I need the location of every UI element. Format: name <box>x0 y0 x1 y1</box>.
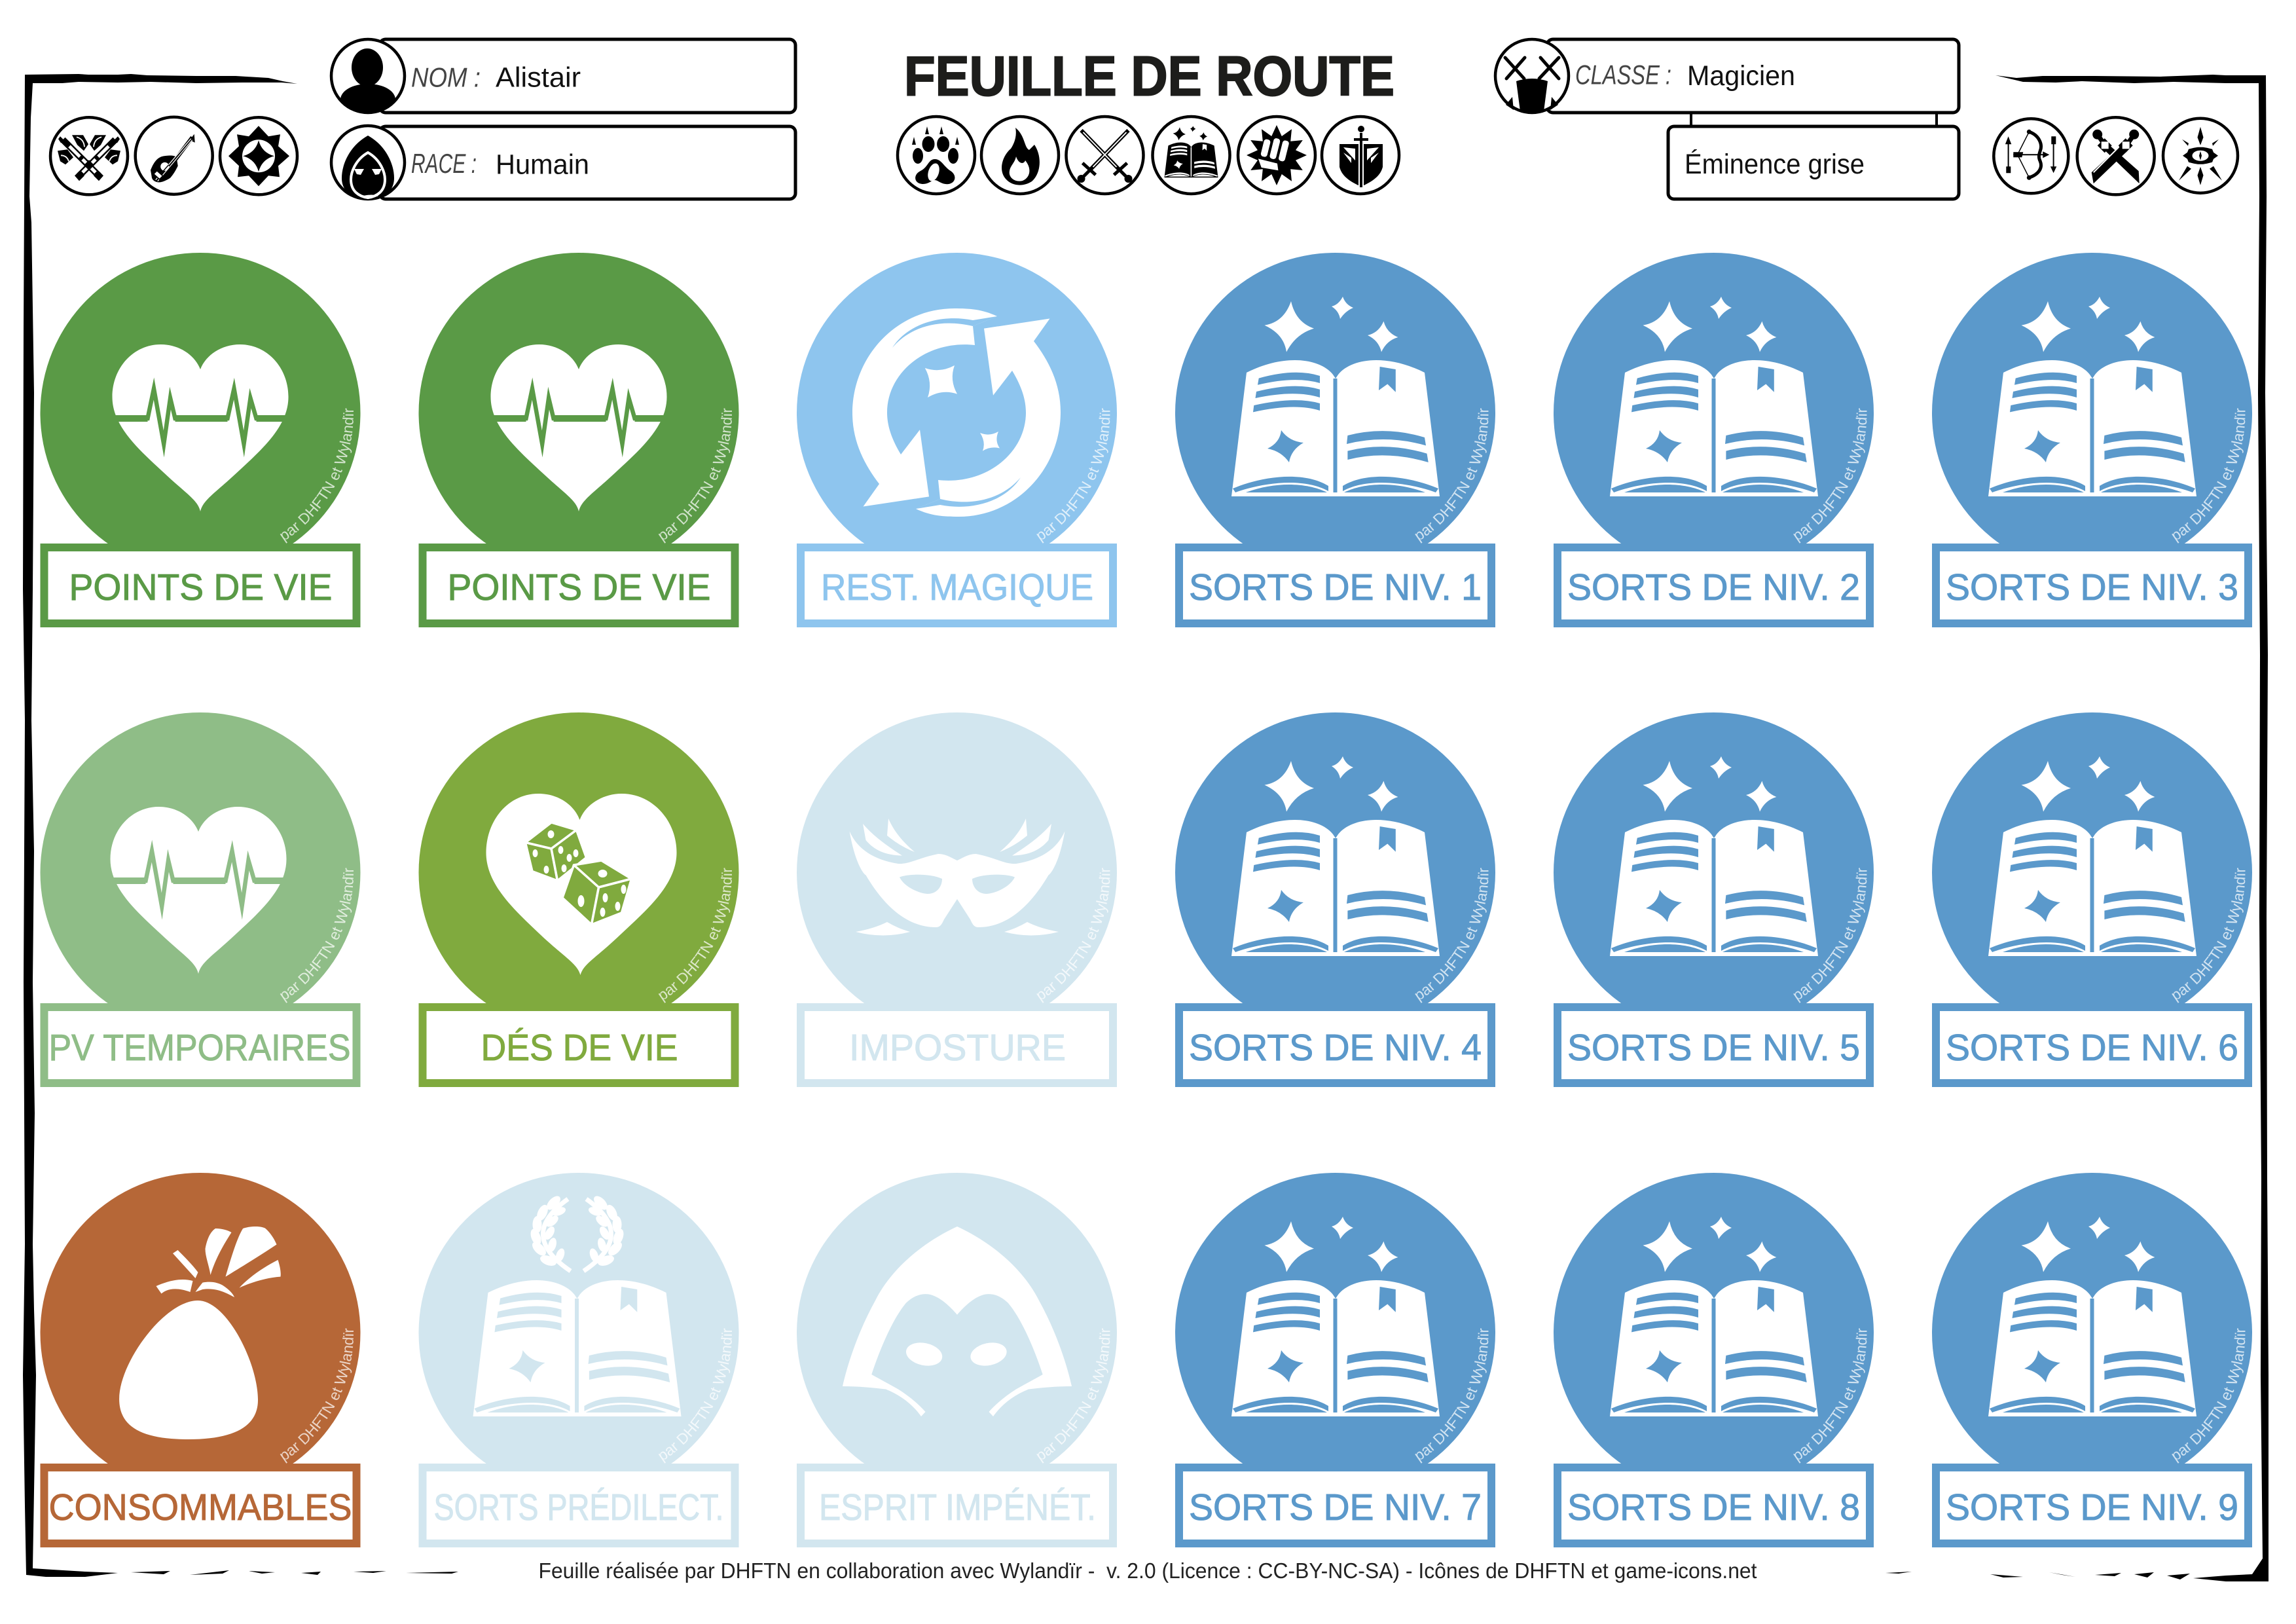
icon: book <box>1610 1280 1818 1416</box>
label: SORTS DE NIV. 3 <box>1946 566 2238 608</box>
label: SORTS DE NIV. 8 <box>1567 1486 1860 1528</box>
icon: book <box>473 1280 681 1416</box>
label box <box>801 547 1113 623</box>
card: des de vie <box>419 712 738 1083</box>
label: race: RACE : <box>411 148 477 179</box>
icon: stars <box>2022 756 2155 812</box>
label box <box>801 1007 1113 1083</box>
icon: crossed axes <box>50 117 128 194</box>
icon: fist burst <box>1238 117 1315 194</box>
badge disc <box>1932 712 2252 1033</box>
title: FEUILLE DE ROUTE <box>904 46 1394 108</box>
label box <box>1558 1467 1870 1543</box>
label box <box>1179 547 1491 623</box>
label box <box>1936 1467 2248 1543</box>
badge disc <box>41 712 360 1033</box>
value: race: Humain <box>496 149 589 181</box>
badge disc <box>1554 253 1874 573</box>
badge disc <box>419 253 738 573</box>
badge disc <box>41 1173 360 1493</box>
label: PV TEMPORAIRES <box>48 1027 351 1069</box>
badge disc <box>1932 253 2252 573</box>
label box <box>423 1467 735 1543</box>
icon: eye sun <box>2163 119 2238 193</box>
label: SORTS DE NIV. 5 <box>1567 1027 1860 1069</box>
icon: book <box>1988 1280 2196 1416</box>
badge disc <box>1175 1173 1495 1493</box>
icon: flame <box>981 117 1059 194</box>
label: DÉS DE VIE <box>481 1027 678 1069</box>
credit: par DHFTN et Wylandïr <box>280 1328 354 1464</box>
icon: heart with dice <box>486 794 677 975</box>
icon: heart <box>107 807 289 974</box>
icon: mask <box>850 819 1065 935</box>
card: restauration magique <box>797 253 1117 623</box>
icon: hooded avatar <box>331 126 405 199</box>
label: nom: NOM : <box>411 62 481 93</box>
label: CONSOMMABLES <box>48 1486 352 1528</box>
icon: book <box>1231 360 1440 496</box>
badge disc <box>419 712 738 1033</box>
label box <box>45 1007 356 1083</box>
card: sorts niveau 5 <box>1554 712 1874 1083</box>
label: SORTS DE NIV. 7 <box>1189 1486 1482 1528</box>
icon: person avatar <box>331 39 405 113</box>
icon: stars <box>2022 297 2155 352</box>
label box <box>45 1467 356 1543</box>
icon: book <box>1231 820 1440 956</box>
field: nom <box>331 39 795 113</box>
credit: par DHFTN et Wylandïr <box>280 868 354 1003</box>
card: sorts niveau 2 <box>1554 253 1874 623</box>
value: sous-classe: Éminence grise <box>1685 149 1865 180</box>
label box <box>1558 547 1870 623</box>
icon: paw with leaf <box>898 117 975 194</box>
card: esprit impenetrable <box>797 1173 1117 1543</box>
badge disc <box>797 1173 1117 1493</box>
icon: stars <box>1265 756 1398 812</box>
badge disc <box>41 253 360 573</box>
credit: par DHFTN et Wylandïr <box>1793 1328 1867 1464</box>
icon: wizard avatar <box>1495 39 1569 113</box>
credit: par DHFTN et Wylandïr <box>2172 409 2246 544</box>
label: POINTS DE VIE <box>448 566 711 608</box>
label box <box>423 547 735 623</box>
badge disc <box>1554 1173 1874 1493</box>
label box <box>423 1007 735 1083</box>
label: SORTS PRÉDILECT. <box>433 1486 724 1528</box>
credit: par DHFTN et Wylandïr <box>1415 1328 1489 1464</box>
icon: stars <box>2022 1217 2155 1272</box>
card: sorts niveau 8 <box>1554 1173 1874 1543</box>
icon: book <box>1231 1280 1440 1416</box>
icon: heart <box>109 344 292 511</box>
badge disc <box>797 253 1117 573</box>
credit: par DHFTN et Wylandïr <box>1793 409 1867 544</box>
card: consommables <box>41 1173 360 1543</box>
icon: spellbook <box>1152 117 1230 194</box>
icon: sack <box>119 1227 281 1439</box>
badge disc <box>797 712 1117 1033</box>
label box <box>801 1467 1113 1543</box>
card: imposture <box>797 712 1117 1083</box>
label box <box>45 547 356 623</box>
icon: book <box>1610 820 1818 956</box>
credit: par DHFTN et Wylandïr <box>659 409 732 544</box>
credit: par DHFTN et Wylandïr <box>280 409 354 544</box>
card: sorts niveau 1 <box>1175 253 1495 623</box>
credit: par DHFTN et Wylandïr <box>1793 868 1867 1003</box>
label box <box>1936 547 2248 623</box>
value: nom: Alistair <box>496 62 581 94</box>
label: SORTS DE NIV. 1 <box>1189 566 1482 608</box>
icon: stars <box>1265 1217 1398 1272</box>
icon: shield and sword <box>1322 117 1399 194</box>
card: sorts niveau 6 <box>1932 712 2252 1083</box>
badge disc <box>1554 712 1874 1033</box>
icon: stars <box>1265 297 1398 352</box>
badge disc <box>1932 1173 2252 1493</box>
card: sorts de predilection <box>419 1173 738 1543</box>
badge disc <box>1175 712 1495 1033</box>
icon: book <box>1988 820 2196 956</box>
card: sorts niveau 3 <box>1932 253 2252 623</box>
credit: par DHFTN et Wylandïr <box>1415 409 1489 544</box>
icon: laurel wreath <box>528 1194 626 1271</box>
icon: stars <box>1643 756 1776 812</box>
label box <box>1936 1007 2248 1083</box>
badge disc <box>419 1173 738 1493</box>
label: SORTS DE NIV. 2 <box>1567 566 1860 608</box>
card: points de vie 1 <box>41 253 360 627</box>
card: sorts niveau 7 <box>1175 1173 1495 1543</box>
label: SORTS DE NIV. 6 <box>1946 1027 2238 1069</box>
icon: stars <box>1643 297 1776 352</box>
label: classe: CLASSE : <box>1575 59 1671 90</box>
label box <box>1558 1007 1870 1083</box>
badge disc <box>1175 253 1495 573</box>
icon: bow and arrows <box>1994 119 2068 193</box>
icon: magic recovery arrows <box>852 308 1061 517</box>
card: points de vie 2 <box>419 253 738 623</box>
card: pv temporaires <box>41 712 360 1083</box>
label: ESPRIT IMPÉNÉT. <box>819 1486 1096 1528</box>
icon: crossed swords <box>1066 117 1143 194</box>
label: POINTS DE VIE <box>69 566 333 608</box>
label box <box>1179 1007 1491 1083</box>
icon: stars <box>1643 1217 1776 1272</box>
credit: par DHFTN et Wylandïr <box>659 1328 732 1463</box>
icon: crossed blades <box>2077 117 2155 194</box>
credit: par DHFTN et Wylandïr <box>1036 868 1110 1003</box>
icon: lute <box>136 117 213 194</box>
field: classe <box>1495 39 1959 199</box>
footer credits: Feuille réalisée par DHFTN en collaboration avec Wylandïr - v. 2.0 (Licence : CC-BY-NC-SA) - Icônes de DHFTN et game-icons.net <box>538 1559 1757 1583</box>
field: race <box>331 126 795 199</box>
credit: par DHFTN et Wylandïr <box>1036 1328 1110 1463</box>
icon: book <box>1610 360 1818 496</box>
label: SORTS DE NIV. 4 <box>1189 1027 1482 1069</box>
icon: hood <box>843 1227 1072 1416</box>
label: IMPOSTURE <box>849 1027 1066 1069</box>
value: classe: Magicien <box>1687 60 1795 92</box>
credit: par DHFTN et Wylandïr <box>1036 409 1110 544</box>
icon: heart <box>487 344 670 511</box>
label: SORTS DE NIV. 9 <box>1946 1486 2238 1528</box>
credit: par DHFTN et Wylandïr <box>1415 868 1489 1003</box>
icon: book <box>1988 360 2196 496</box>
credit: par DHFTN et Wylandïr <box>2172 1328 2246 1464</box>
label box <box>1179 1467 1491 1543</box>
icon: star sun <box>220 117 297 194</box>
credit: par DHFTN et Wylandïr <box>2172 868 2246 1003</box>
label: REST. MAGIQUE <box>821 566 1093 608</box>
card: sorts niveau 9 <box>1932 1173 2252 1543</box>
credit: par DHFTN et Wylandïr <box>659 868 732 1003</box>
card: sorts niveau 4 <box>1175 712 1495 1083</box>
